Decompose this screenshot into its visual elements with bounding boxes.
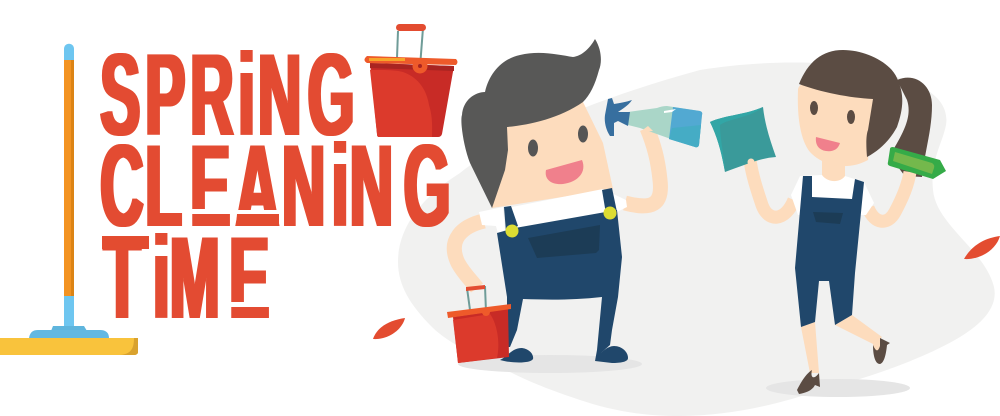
title: SPRiNG bbox=[100, 29, 354, 160]
man shadow bbox=[458, 355, 642, 373]
character: man bbox=[454, 39, 660, 363]
icon: spray bottle bbox=[605, 98, 702, 147]
leaf right bbox=[964, 236, 1000, 259]
mop bbox=[0, 44, 138, 355]
icon: large red bucket bbox=[364, 24, 458, 137]
icon: small red bucket bbox=[447, 285, 511, 363]
title bbox=[100, 29, 450, 343]
title: TiME bbox=[104, 212, 269, 343]
background blob bbox=[398, 63, 995, 416]
title: CLEANiNG bbox=[100, 120, 450, 251]
title letter cuts and bars bbox=[102, 209, 282, 307]
icon: green sponge pack bbox=[888, 147, 946, 179]
character: woman bbox=[750, 50, 932, 397]
icon: teal cloth bbox=[710, 107, 776, 172]
leaf left bbox=[373, 318, 405, 339]
